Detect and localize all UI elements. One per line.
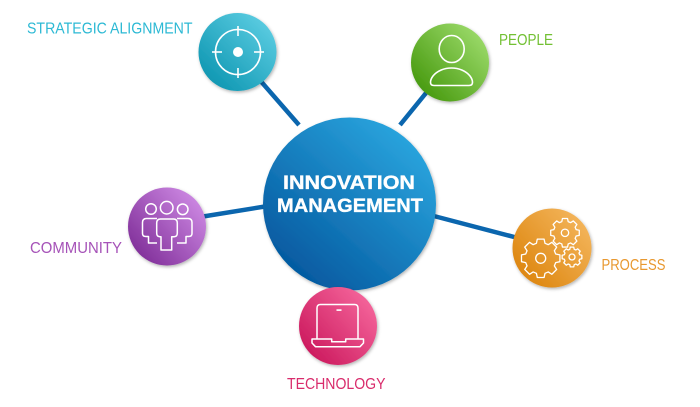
label: strategic alignment: STRATEGIC ALIGNMENT xyxy=(27,20,193,37)
label: people: PEOPLE xyxy=(499,32,553,49)
central hub circle xyxy=(263,118,436,290)
node: community xyxy=(128,188,206,266)
hub title: INNOVATION xyxy=(283,173,415,194)
node: people xyxy=(411,24,489,102)
central hub circle: MANAGEMENT xyxy=(277,196,423,217)
label: community: COMMUNITY xyxy=(30,240,122,257)
label: technology: TECHNOLOGY xyxy=(287,376,386,393)
icon: laptop xyxy=(312,304,364,347)
label: process: PROCESS xyxy=(602,257,666,274)
connector lines xyxy=(200,78,518,292)
icon: target xyxy=(212,26,264,78)
icon: group of people xyxy=(142,201,192,250)
node: technology xyxy=(299,287,377,365)
icon: person xyxy=(430,36,472,86)
node: process xyxy=(512,208,592,288)
node: strategic alignment xyxy=(198,13,276,91)
icon: gears xyxy=(521,219,582,278)
